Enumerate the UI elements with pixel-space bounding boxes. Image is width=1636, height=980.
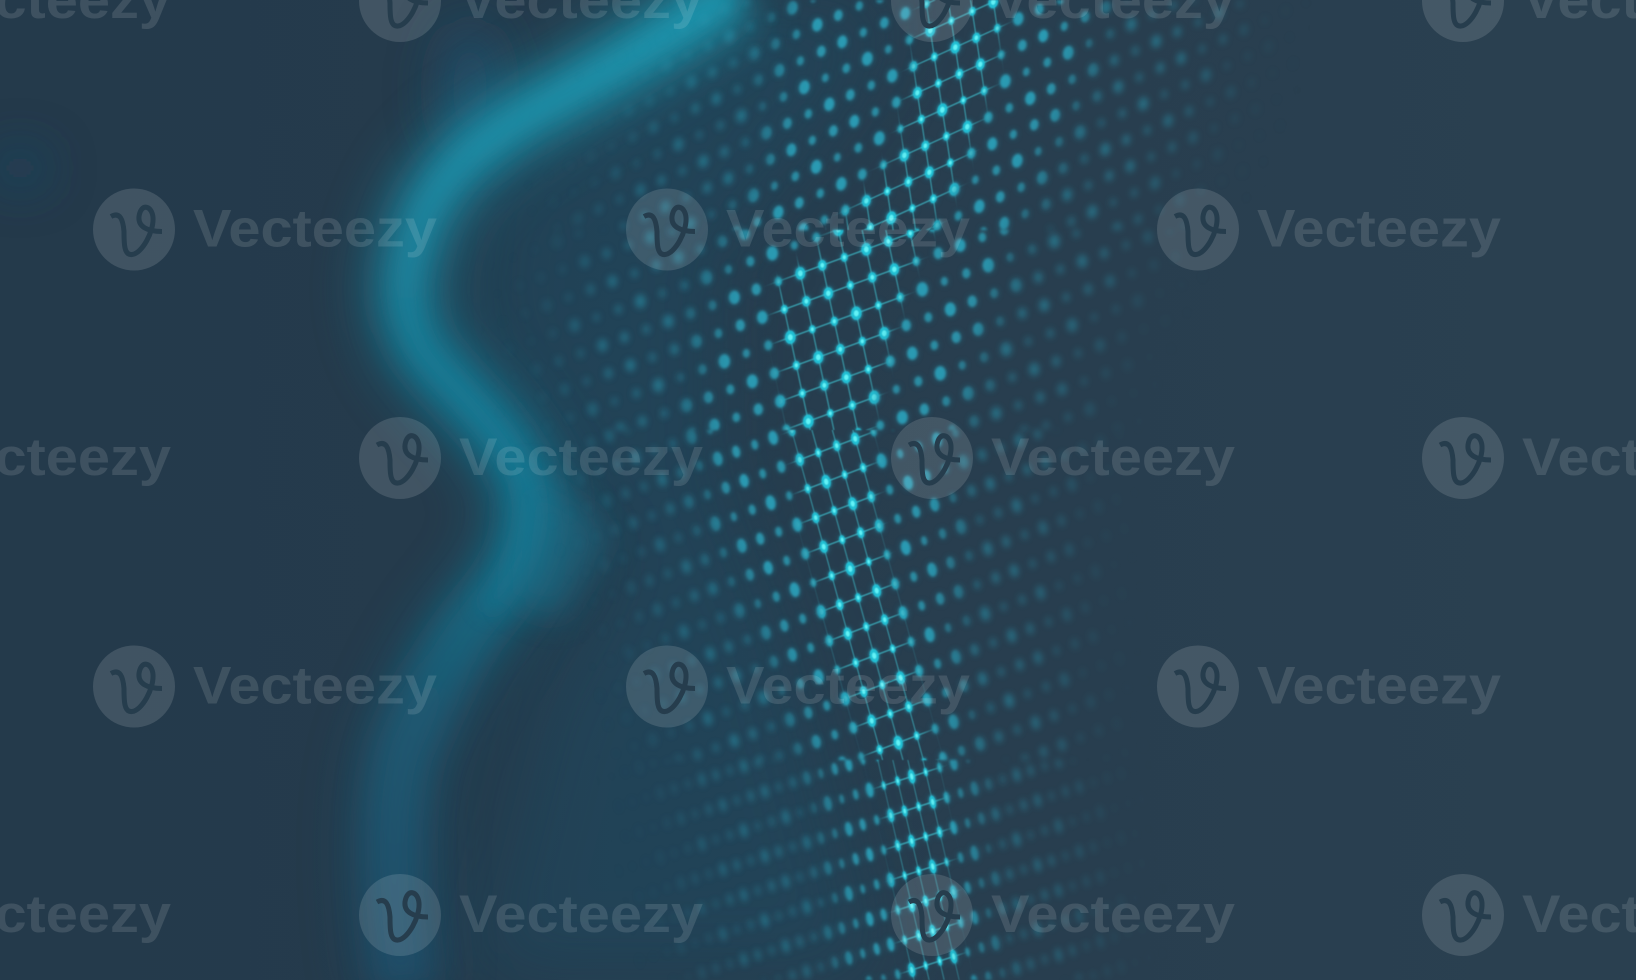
watermark row 4: Vecteezy bbox=[726, 656, 971, 716]
watermark row 2: Vecteezy bbox=[726, 200, 971, 258]
watermark row 2: Vecteezy bbox=[193, 200, 438, 258]
watermark row 5: Vecteezy bbox=[459, 885, 704, 944]
watermark row 2 bbox=[93, 188, 1502, 270]
watermark row 4 bbox=[93, 646, 1502, 728]
watermark row 4: Vecteezy bbox=[193, 656, 438, 716]
mesh haze between band and ridge bbox=[470, 0, 900, 980]
watermark row 3: Vecteezy bbox=[459, 428, 704, 487]
watermark row 1 bbox=[0, 0, 1636, 42]
faint blue smears bbox=[0, 20, 504, 188]
mid-focus dot field bbox=[684, 0, 1110, 980]
watermark row 5: Vecteezy bbox=[991, 885, 1236, 944]
blurred glowing band bbox=[394, 0, 735, 980]
watermark row 2: Vecteezy bbox=[1257, 200, 1502, 258]
far blurred dot field bbox=[544, 0, 1248, 980]
watermark row 5 bbox=[0, 874, 1636, 956]
bright connected lattice ridge bbox=[768, 0, 1010, 980]
watermark row 4: Vecteezy bbox=[1257, 656, 1502, 716]
watermark row 3: Vecteezy bbox=[991, 428, 1236, 487]
watermark row 3 bbox=[0, 417, 1636, 499]
